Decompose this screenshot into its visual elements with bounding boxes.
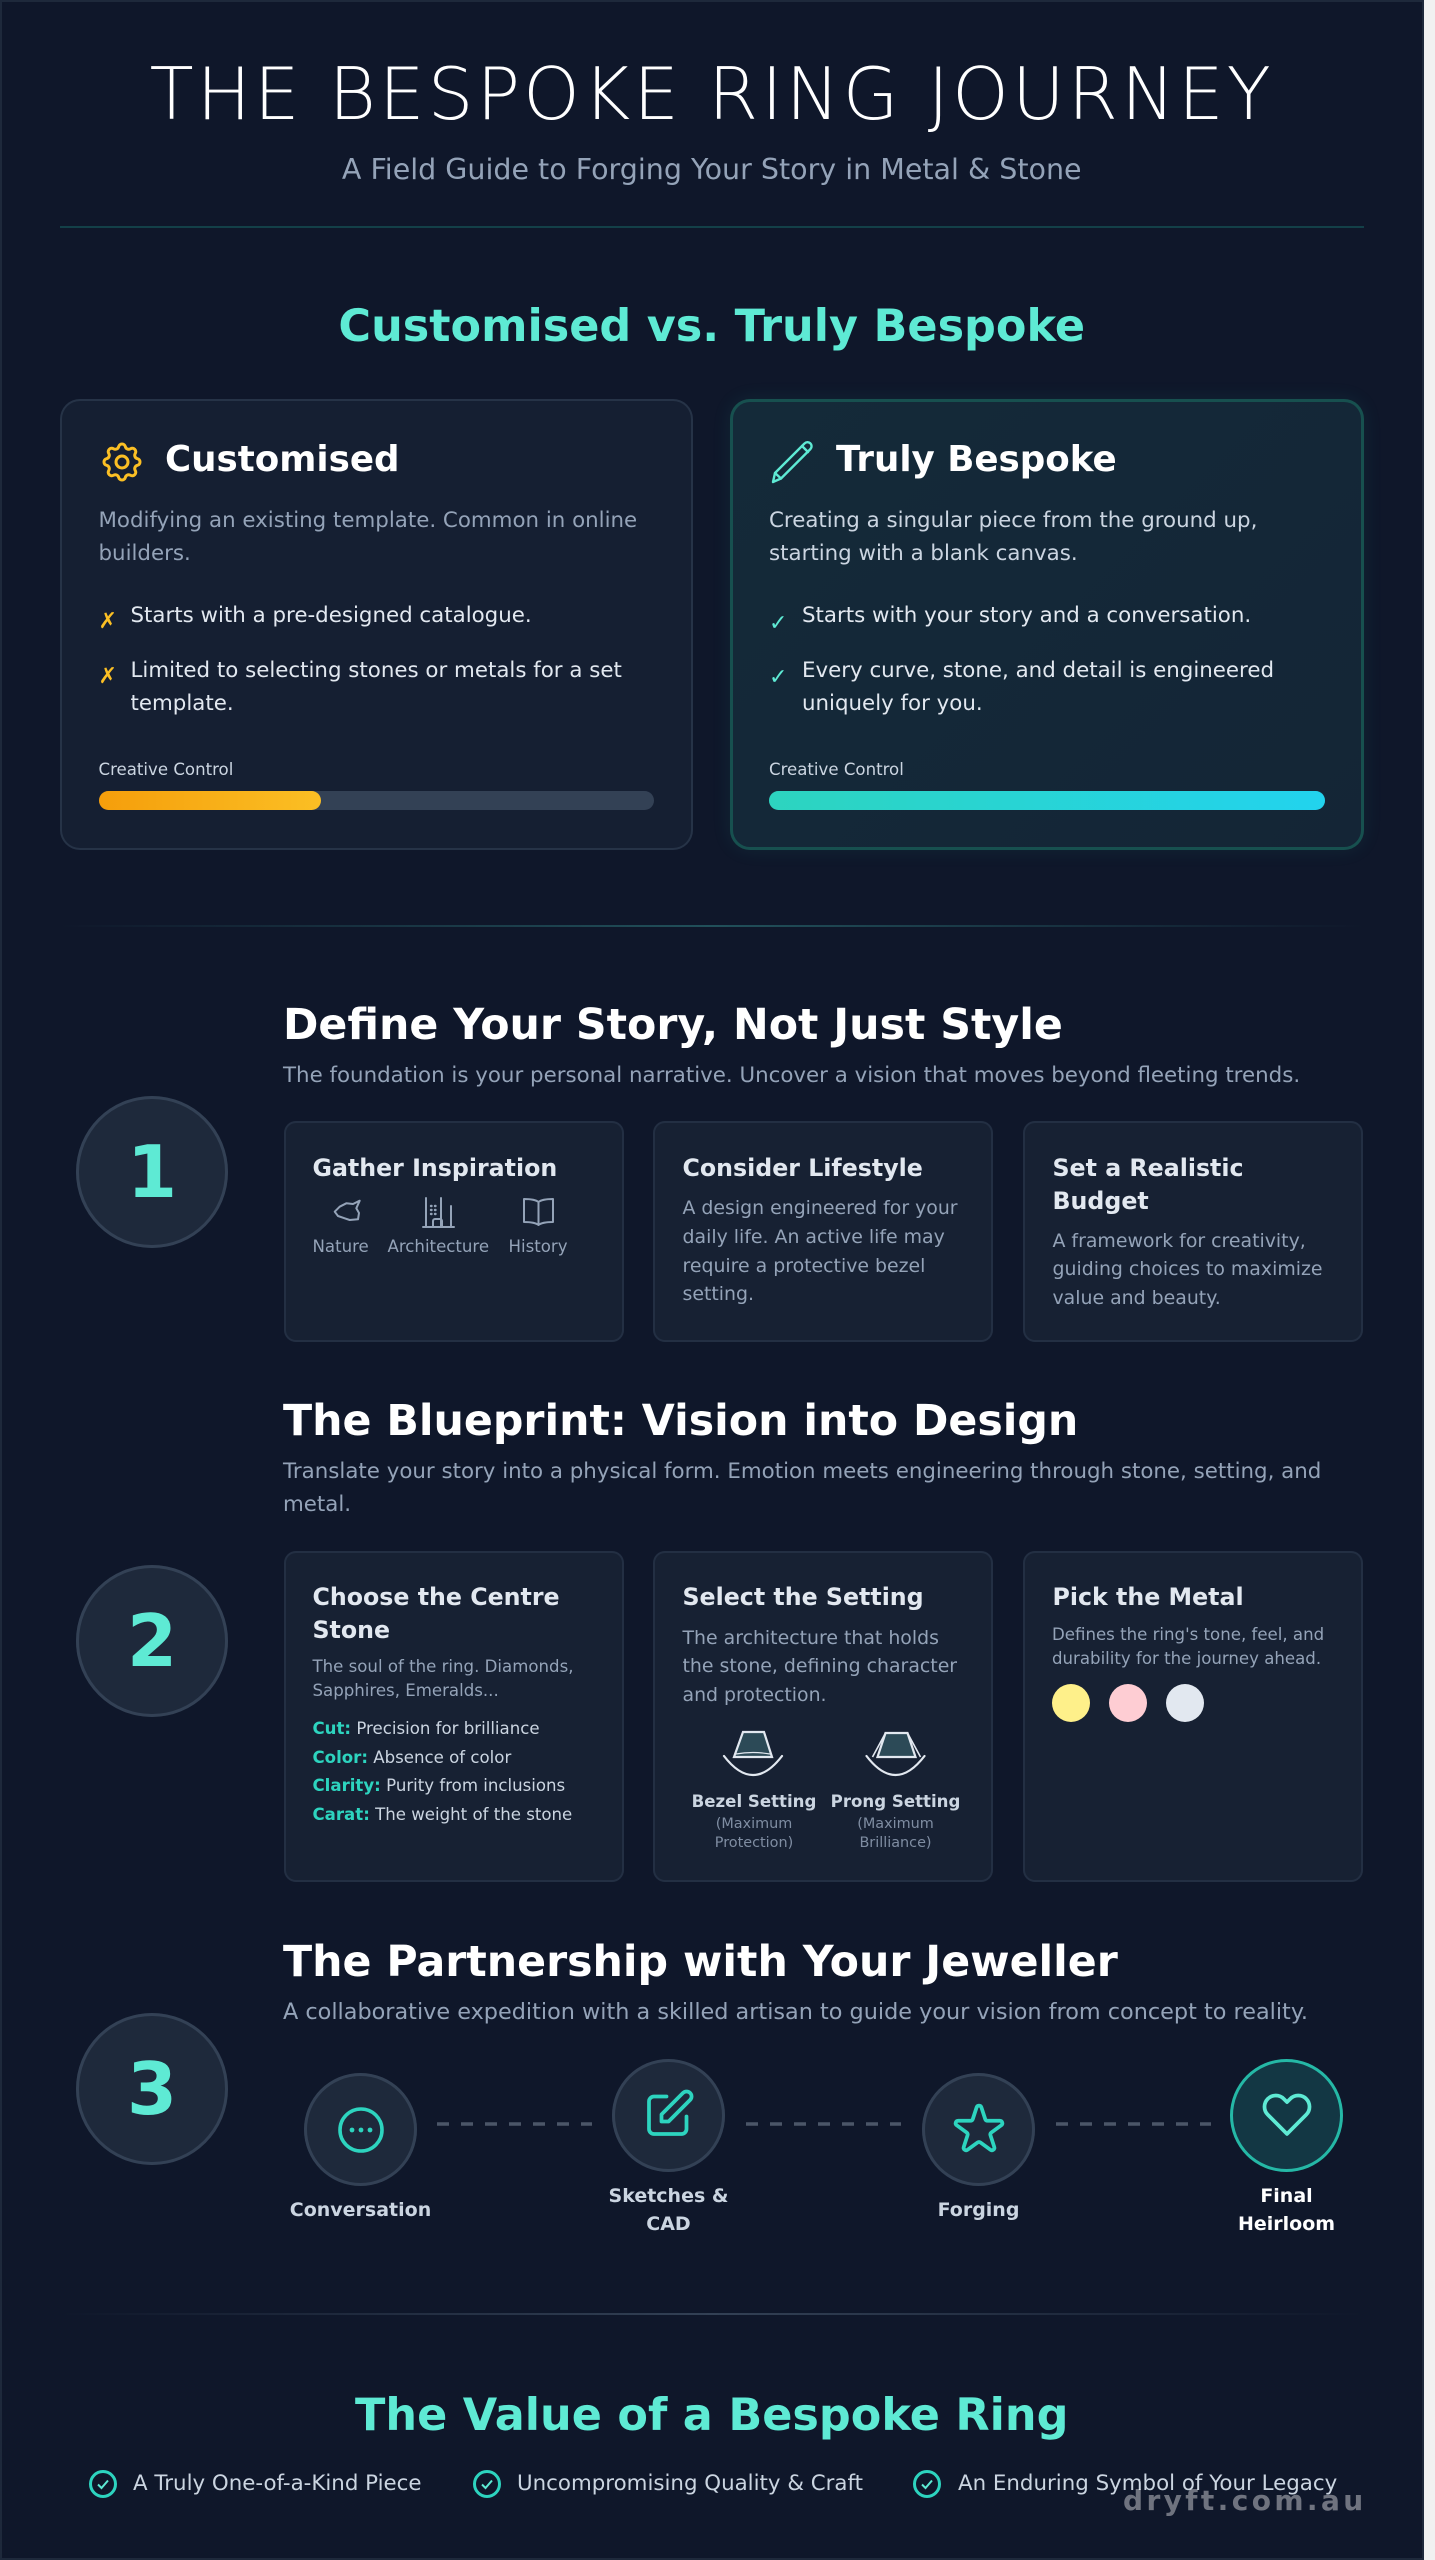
card heading: Budget — [1052, 1187, 1149, 1215]
4Cs list: Cut: Precision for brilliance — [312, 1719, 540, 1738]
icon: check circle — [89, 2470, 117, 2498]
label: creative control: Creative Control — [769, 760, 904, 778]
icon: nature — [334, 1200, 361, 1221]
4Cs list: Clarity: Purity from inclusions — [312, 1776, 565, 1795]
card heading — [1052, 1154, 1244, 1215]
card heading: Choose the Centre — [312, 1583, 560, 1611]
card text — [682, 1197, 958, 1305]
card text: the stone, defining character — [682, 1655, 957, 1677]
card text: and protection. — [682, 1684, 827, 1706]
value item: Uncompromising Quality & Craft — [517, 2471, 863, 2496]
card text: durability for the journey ahead. — [1052, 1648, 1321, 1668]
check mark: ✓ — [769, 611, 787, 636]
card heading — [312, 1583, 560, 1644]
intro text: Translate your story into a physical form. Emotion meets engineering through stone, setting, and — [283, 1459, 1321, 1484]
card text: Defines the ring's tone, feel, and — [1052, 1624, 1324, 1644]
step 3 — [76, 1936, 1343, 2235]
bullet: Starts with your story and a conversation. — [802, 602, 1251, 628]
intro text: metal. — [283, 1492, 351, 1517]
bullet: uniquely for you. — [802, 691, 983, 716]
number badge 3: 3 — [127, 2047, 177, 2131]
label: Forging — [938, 2198, 1019, 2220]
number badge 3 — [76, 2013, 228, 2165]
icon: prong setting — [865, 1732, 926, 1776]
heading: customised: Customised — [165, 439, 400, 480]
icon: bezel setting — [722, 1730, 784, 1776]
number badge 2 — [76, 1564, 228, 1716]
label: Prong Setting — [831, 1792, 960, 1811]
card text: setting. — [682, 1283, 754, 1305]
label: Sketches & — [609, 2184, 728, 2206]
icon: check circle — [912, 2469, 942, 2499]
card text: guiding choices to maximize — [1052, 1258, 1323, 1280]
node: forging — [922, 2073, 1035, 2220]
caption: Protection) — [715, 1835, 793, 1851]
heading: the blueprint: The Blueprint: Vision into Design — [283, 1396, 1078, 1446]
card heading: Gather Inspiration — [312, 1154, 557, 1182]
bullet — [130, 658, 622, 716]
card text: value and beauty. — [1052, 1287, 1221, 1309]
label: CAD — [646, 2213, 691, 2235]
card heading: Select the Setting — [682, 1583, 924, 1611]
card text — [1052, 1624, 1324, 1668]
4Cs list — [312, 1719, 572, 1824]
icon: chat — [304, 2073, 417, 2186]
watermark: dryft.com.au — [1123, 2484, 1367, 2517]
caption — [857, 1816, 934, 1851]
card heading: Pick the Metal — [1052, 1583, 1244, 1611]
step 2 — [76, 1396, 1363, 1882]
heading: truly bespoke: Truly Bespoke — [836, 439, 1117, 480]
subtitle: A Field Guide to Forging Your Story in Metal & Stone — [342, 152, 1082, 186]
icon: pencil — [772, 441, 813, 484]
node: conversation — [290, 2073, 431, 2220]
number badge 1: 1 — [127, 1130, 177, 1214]
panel: customised — [60, 399, 693, 850]
value item: A Truly One-of-a-Kind Piece — [133, 2471, 422, 2496]
card: gather inspiration — [284, 1121, 624, 1342]
card text: The architecture that holds — [682, 1626, 939, 1648]
connector — [746, 2122, 901, 2126]
timeline — [290, 2059, 1343, 2235]
bullet — [802, 658, 1274, 716]
caption: Brilliance) — [859, 1835, 932, 1851]
icon: check circle — [473, 2470, 501, 2498]
node: sketches and cad — [609, 2059, 728, 2235]
icon: pencil and pad — [612, 2058, 725, 2172]
icon: book — [523, 1198, 554, 1226]
card text — [312, 1657, 574, 1700]
caption — [715, 1816, 793, 1851]
label: nature: Nature — [312, 1236, 369, 1256]
description — [98, 508, 637, 566]
label: history: History — [508, 1236, 568, 1256]
value list — [89, 2470, 1337, 2498]
bullet: Every curve, stone, and detail is engineered — [802, 658, 1274, 682]
caption: (Maximum — [857, 1816, 934, 1832]
heading: the partnership: The Partnership with Your Jeweller — [283, 1936, 1118, 1986]
card text: A framework for creativity, — [1052, 1230, 1306, 1252]
card: centre stone — [284, 1551, 624, 1882]
card: select the setting — [652, 1551, 993, 1882]
heading: the value: The Value of a Bespoke Ring — [355, 2390, 1068, 2440]
check mark: ✓ — [769, 665, 787, 690]
meter: 100 percent — [769, 791, 1325, 810]
card heading: Stone — [312, 1616, 390, 1644]
description: builders. — [98, 541, 191, 566]
caption: (Maximum — [716, 1816, 792, 1832]
label — [1238, 2184, 1335, 2235]
description: Modifying an existing template. Common in online — [98, 508, 637, 533]
heading: customised vs bespoke: Customised vs. Truly Bespoke — [338, 301, 1085, 352]
card text: require a protective bezel — [682, 1255, 925, 1277]
label: Conversation — [290, 2198, 431, 2220]
intro text: The foundation is your personal narrative. Uncover a vision that moves beyond fleeting trends. — [283, 1063, 1300, 1088]
title: THE BESPOKE RING JOURNEY — [150, 52, 1274, 136]
value item: An Enduring Symbol of Your Legacy — [958, 2471, 1337, 2496]
option: bezel setting — [692, 1730, 816, 1851]
icon: architecture — [422, 1197, 455, 1228]
card heading: Set a Realistic — [1052, 1154, 1244, 1182]
description — [769, 508, 1257, 566]
label: Heirloom — [1238, 2213, 1335, 2235]
heading: define your story: Define Your Story, Not Just Style — [283, 1000, 1063, 1050]
label: Final — [1260, 2184, 1313, 2206]
connector — [1056, 2122, 1211, 2126]
connector — [437, 2122, 592, 2126]
4Cs list: Carat: The weight of the stone — [312, 1805, 572, 1824]
bullet: Limited to selecting stones or metals for a set — [130, 658, 622, 682]
card: consider lifestyle — [652, 1121, 993, 1342]
card heading: Consider Lifestyle — [682, 1154, 923, 1182]
card text: Sapphires, Emeralds... — [312, 1681, 499, 1700]
icon: star — [922, 2073, 1035, 2186]
card text — [1052, 1230, 1323, 1309]
swatch: gold — [1052, 1684, 1090, 1722]
card: realistic budget — [1022, 1121, 1363, 1342]
number badge 1 — [76, 1096, 228, 1248]
card: pick the metal — [1022, 1551, 1363, 1882]
cross mark: ✗ — [98, 609, 117, 634]
card text: daily life. An active life may — [682, 1226, 945, 1248]
panel: truly bespoke — [730, 399, 1364, 850]
card text — [682, 1626, 957, 1706]
icon: heart — [1230, 2058, 1343, 2172]
option: prong setting — [831, 1732, 960, 1851]
bullet: template. — [130, 691, 234, 716]
node: final heirloom — [1230, 2059, 1343, 2235]
label: architecture: Architecture — [388, 1236, 489, 1256]
description: Creating a singular piece from the ground up, — [769, 508, 1257, 533]
label: Bezel Setting — [692, 1792, 816, 1811]
cross mark: ✗ — [98, 664, 117, 688]
intro text: A collaborative expedition with a skilled artisan to guide your vision from concept to reality. — [283, 1998, 1308, 2024]
swatch: platinum — [1166, 1684, 1204, 1722]
meter: 40 percent — [98, 791, 654, 810]
4Cs list: Color: Absence of color — [312, 1748, 511, 1767]
intro text — [282, 1459, 1321, 1517]
label: creative control: Creative Control — [98, 760, 233, 778]
icon: gear — [102, 442, 142, 482]
number badge 2: 2 — [127, 1598, 177, 1682]
card text: A design engineered for your — [682, 1197, 958, 1219]
step 1 — [76, 1000, 1363, 1342]
bullet: Starts with a pre-designed catalogue. — [130, 602, 532, 628]
description: starting with a blank canvas. — [769, 541, 1078, 566]
card text: The soul of the ring. Diamonds, — [312, 1657, 574, 1676]
swatch: rose gold — [1108, 1684, 1146, 1722]
label — [609, 2184, 728, 2235]
